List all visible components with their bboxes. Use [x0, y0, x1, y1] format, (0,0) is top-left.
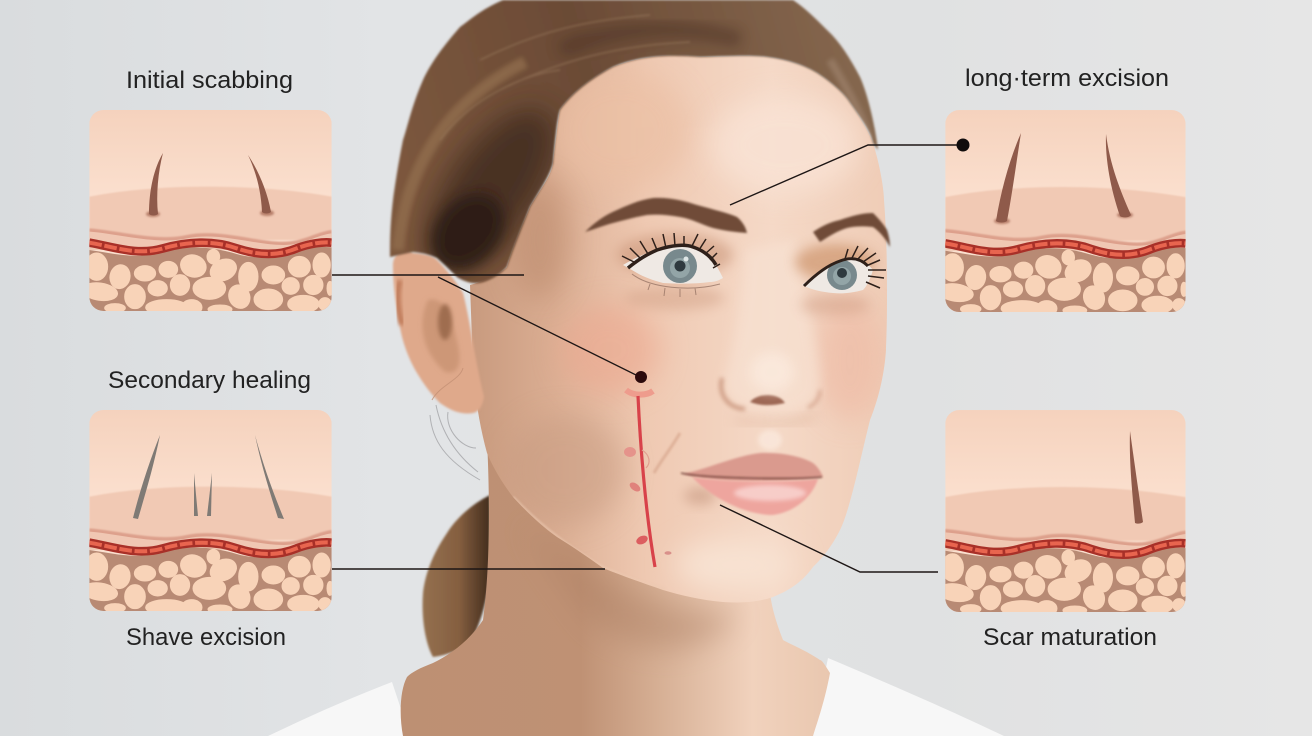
heading: initial scabbing: Initial scabbing	[126, 67, 293, 94]
leader: shave excision	[332, 568, 605, 570]
heading: shave excision: Shave excision	[126, 624, 286, 651]
leader: scar maturation	[720, 505, 938, 572]
leader: long-term excision	[730, 145, 960, 205]
shirt	[268, 658, 1004, 736]
hair	[385, 0, 885, 292]
hairs	[146, 153, 274, 217]
panel: scar maturation	[938, 410, 1187, 616]
scar	[624, 390, 672, 567]
hairs	[994, 133, 1133, 224]
neck	[401, 440, 830, 736]
nose	[721, 240, 820, 450]
heading: secondary healing: Secondary healing	[108, 367, 311, 394]
heading: long-term excision: long·term excision	[965, 65, 1169, 92]
ponytail	[423, 495, 490, 657]
leader: initial scabbing	[332, 274, 524, 276]
right eyebrow	[813, 213, 890, 247]
left eyebrow	[585, 198, 747, 233]
eye shadows	[617, 233, 733, 277]
lip shadow	[684, 487, 716, 505]
under-chin shadow	[520, 520, 740, 649]
panel: long-term excision	[938, 110, 1187, 316]
right eye	[802, 246, 886, 293]
wispy hair	[430, 405, 480, 480]
portrait photo of woman	[268, 0, 1004, 736]
panel: secondary healing	[82, 410, 333, 615]
hair	[1130, 431, 1143, 524]
jaw highlight	[513, 496, 601, 566]
leader lines and markers	[332, 145, 960, 572]
ear	[393, 251, 484, 413]
leader: cheek marker	[438, 277, 640, 377]
face	[470, 56, 887, 602]
marker: panel dot	[956, 138, 970, 152]
marker: cheek dot	[635, 371, 647, 383]
lips	[681, 453, 823, 515]
panel: initial scabbing	[82, 110, 333, 315]
left eye	[622, 233, 723, 297]
hairs	[133, 435, 284, 519]
smile crease	[654, 433, 680, 473]
heading: scar maturation: Scar maturation	[983, 624, 1157, 651]
